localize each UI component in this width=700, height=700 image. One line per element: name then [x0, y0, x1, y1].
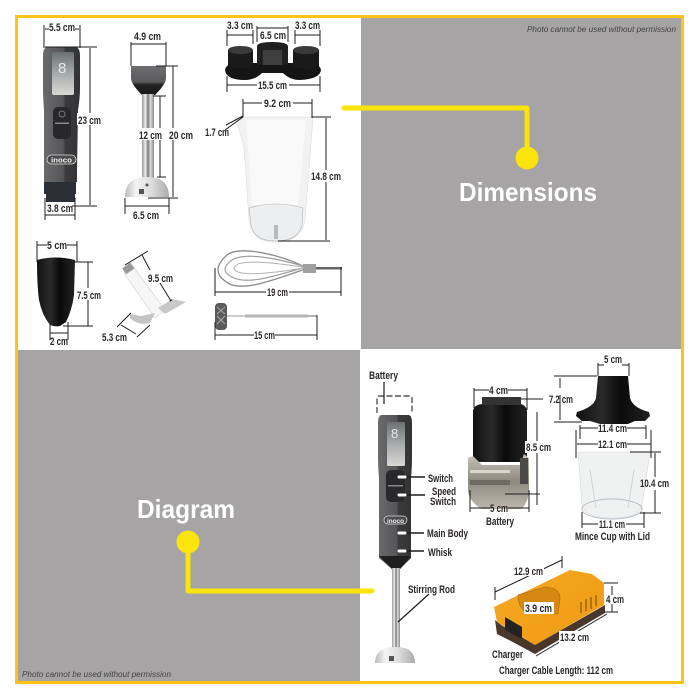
blending shaft with dimensions [125, 31, 194, 222]
whisk with dimensions [215, 251, 342, 299]
assembled hand blender with callouts: 8 [391, 426, 398, 441]
watermark bottom: Photo cannot be used without permission [22, 669, 171, 679]
frother with dimensions [215, 303, 317, 342]
label 3.9 cm [524, 602, 554, 614]
label 10.4 cm: 10.4 cm [640, 478, 669, 490]
label 20 cm [168, 128, 194, 140]
label 3.8 cm: 3.8 cm [47, 203, 73, 215]
label Switch: Switch [428, 473, 453, 485]
connector arrow: diagram [176, 530, 372, 591]
watermark top: Photo cannot be used without permission [527, 24, 676, 34]
charger with dimensions: 13.2 cm [560, 632, 589, 644]
label Speed Switch: Switch [430, 496, 456, 508]
measuring jug with dimensions [205, 98, 342, 242]
label 9.5 cm: 9.5 cm [148, 273, 173, 285]
label 23 cm [77, 113, 102, 125]
label 14.8 cm [310, 170, 342, 182]
assembled hand blender with callouts: inoco [387, 519, 404, 525]
label 4 cm: 4 cm [489, 385, 508, 397]
label 11.1 cm: 11.1 cm [599, 519, 625, 531]
label 15 cm: 15 cm [254, 330, 275, 342]
battery pack with dimensions [468, 385, 552, 528]
label 8.5 cm [525, 441, 552, 453]
label 2 cm: 2 cm [50, 336, 68, 348]
label Mince Cup with Lid: Mince Cup with Lid [575, 531, 650, 543]
heading: Diagram: Diagram [137, 494, 235, 524]
label Speed Switch [430, 486, 456, 508]
motor handle with dimensions [43, 22, 102, 220]
black cup with dimensions: 7.5 cm [77, 290, 101, 302]
label 11.4 cm: 11.4 cm [598, 423, 627, 435]
lid with dimensions [549, 354, 650, 439]
label Main Body: Main Body [427, 528, 469, 540]
label 1.7 cm: 1.7 cm [205, 127, 229, 139]
battery pack with dimensions: 8.5 cm [526, 442, 551, 454]
label Battery: Battery [369, 370, 399, 382]
triple mount with dimensions [225, 20, 321, 92]
label 6.5 cm: 6.5 cm [133, 210, 159, 222]
blending shaft with dimensions: 12 cm [139, 130, 162, 142]
label Speed Switch: Speed [432, 486, 456, 498]
chopping blade with dimensions [102, 251, 186, 344]
label Battery caption: Battery [486, 516, 515, 528]
label Charger: Charger [492, 649, 524, 661]
label 4.9 cm: 4.9 cm [134, 31, 161, 43]
connector arrow: dimensions [344, 108, 538, 170]
label 12.9 cm [513, 564, 544, 576]
icon: battery dashed outline [377, 396, 412, 413]
label 5 cm: 5 cm [604, 354, 622, 366]
label centre 6.5 cm: 6.5 cm [260, 30, 286, 42]
label 5 cm: 5 cm [490, 503, 508, 515]
label 7.5 cm [76, 288, 102, 300]
label Stirring Rod: Stirring Rod [408, 584, 455, 596]
label 12.1 cm: 12.1 cm [598, 439, 627, 451]
motor handle with dimensions: 23 cm [78, 115, 101, 127]
label Whisk: Whisk [428, 547, 453, 559]
label 9.2 cm: 9.2 cm [264, 98, 291, 110]
label 5.3 cm: 5.3 cm [102, 332, 127, 344]
motor handle with dimensions: 8 [58, 60, 66, 77]
motor handle with dimensions: inoco [51, 158, 72, 164]
blending shaft with dimensions: 20 cm [169, 130, 193, 142]
measuring jug with dimensions: 14.8 cm [311, 171, 341, 183]
panel: diagram heading background [18, 350, 360, 681]
label 4 cm: 4 cm [606, 594, 624, 606]
mince cup with dimensions [575, 430, 669, 543]
assembled hand blender with callouts [369, 370, 469, 663]
charger with dimensions: 12.9 cm [514, 566, 543, 578]
label cable length: Charger Cable Length: 112 cm [499, 665, 613, 677]
label 19 cm: 19 cm [267, 287, 288, 299]
label left 3.3 cm: 3.3 cm [227, 20, 253, 32]
label 12 cm [138, 128, 163, 140]
label 15.5 cm: 15.5 cm [258, 80, 287, 92]
heading: Dimensions: Dimensions [459, 177, 597, 207]
label 13.2 cm [559, 631, 591, 643]
label right 3.3 cm: 3.3 cm [295, 20, 320, 32]
label 5.5 cm: 5.5 cm [49, 22, 75, 34]
charger with dimensions: 3.9 cm [525, 603, 552, 615]
charger with dimensions [492, 556, 624, 677]
panel: dimensions heading background [361, 18, 681, 349]
black cup with dimensions [37, 240, 102, 348]
label 5 cm: 5 cm [47, 240, 67, 252]
label 7.2 cm: 7.2 cm [549, 394, 573, 406]
